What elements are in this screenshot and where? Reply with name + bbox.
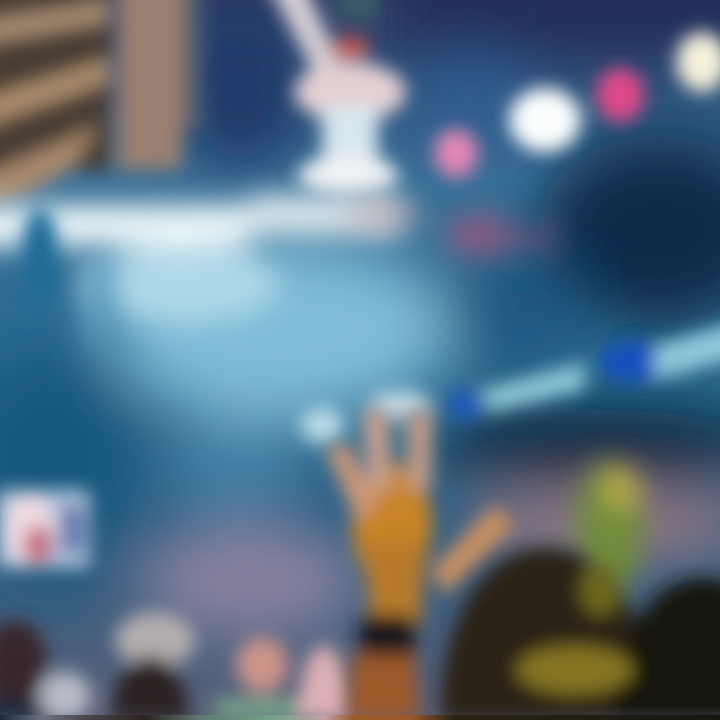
dark blue banner shadow xyxy=(84,250,116,350)
wristband xyxy=(360,615,415,657)
blue light strip right xyxy=(300,315,720,443)
basketball hoop and backboard xyxy=(255,0,406,195)
foreground green jersey xyxy=(576,460,644,590)
left video screen xyxy=(0,490,90,568)
ceiling rafters top left xyxy=(0,0,202,215)
white light band xyxy=(0,195,400,323)
pink haze xyxy=(345,201,563,257)
bottom edge floor strip xyxy=(0,715,720,720)
raised hand xyxy=(325,408,515,720)
foreground heads xyxy=(440,548,720,720)
crowd on the left xyxy=(0,612,350,720)
arena lights xyxy=(434,32,720,177)
blue banner on left xyxy=(22,207,58,303)
